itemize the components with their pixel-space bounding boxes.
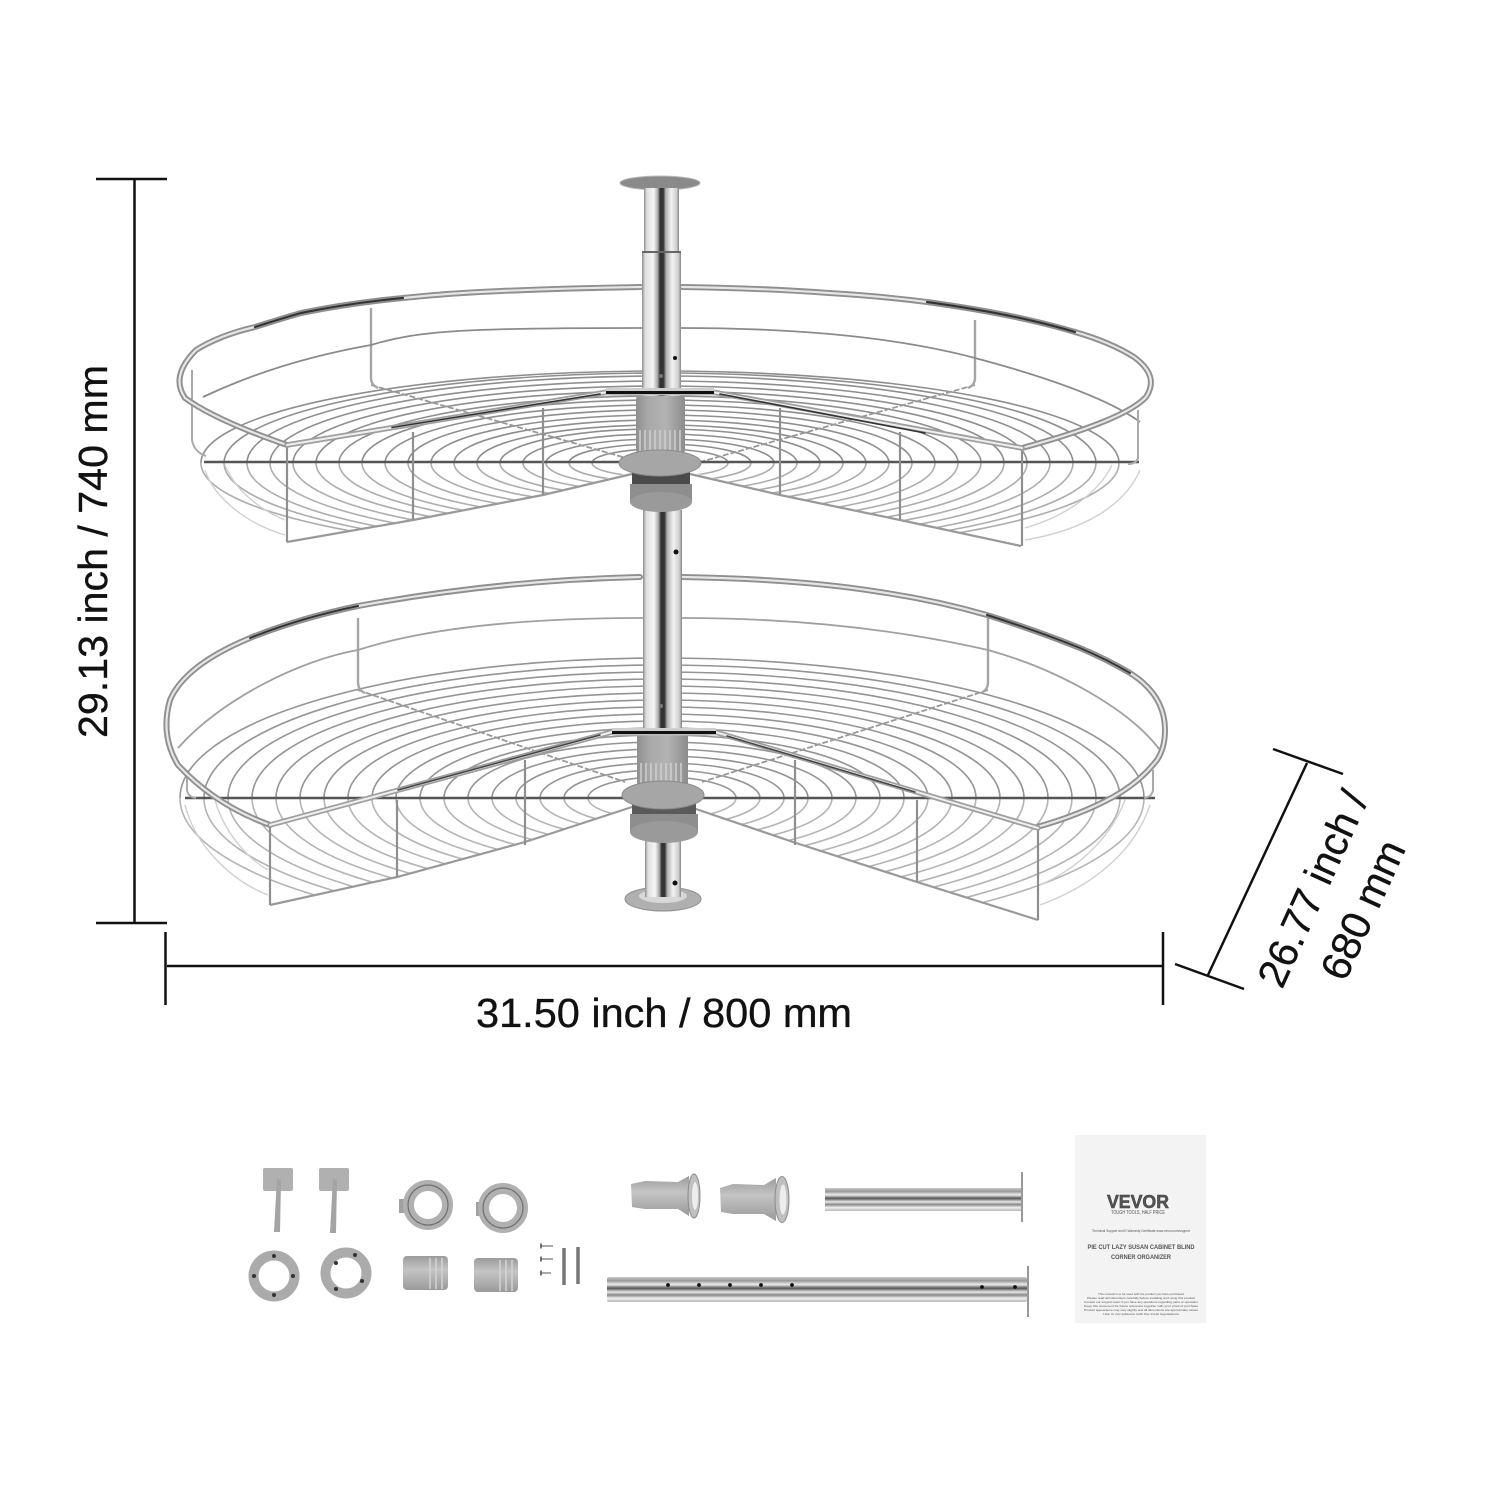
upper basket rim [180, 287, 1151, 448]
part: instruction manual: CORNER ORGANIZER [1111, 1255, 1172, 1261]
part: bearing rings [399, 1185, 523, 1228]
part: instruction manual [1075, 1135, 1206, 1323]
dimension: height [70, 179, 167, 923]
lower hub [612, 728, 716, 843]
upper basket floor wires [201, 371, 1139, 555]
part: instruction manual: TOUGH TOOLS, HALF PRICE [1111, 1210, 1166, 1216]
manual fine print: Keep this document for future reference together with your proof of purchase [1084, 1304, 1198, 1308]
manual fine print: Please read all instructions carefully before installing and using this product [1087, 1296, 1195, 1300]
part: bearing connectors [631, 1174, 789, 1222]
manual fine print: Use in compliance with the local regulations [1103, 1312, 1180, 1316]
part: wall brackets [263, 1168, 349, 1233]
lower basket rim [166, 577, 1165, 828]
upper basket walls [192, 308, 1140, 546]
middle pole [643, 510, 682, 732]
dimension: width [166, 932, 1163, 1036]
part: flange washers [252, 1252, 366, 1297]
lower basket [166, 577, 1165, 938]
manual fine print: This manual is to be used with the product you have purchased [1098, 1292, 1184, 1296]
pole holes [659, 356, 678, 886]
bottom mounting plate [625, 887, 701, 911]
manual logo: VEVOR [1107, 1192, 1169, 1212]
part: screws and pins [541, 1244, 578, 1285]
top mounting plate [620, 176, 700, 190]
bottom pole [645, 840, 681, 897]
part: instruction manual: Technical Support and E-Warranty Certificate www.vevor.com/support [1092, 1229, 1190, 1233]
manual fine print: Contact our support team if you have any questions regarding parts or operation [1084, 1300, 1198, 1304]
depth label line 1: 26.77 inch / [1248, 783, 1378, 994]
upper basket [180, 287, 1151, 555]
part: splined sleeves [403, 1256, 518, 1292]
central pole [620, 176, 701, 911]
manual fine print: Product appearance may vary slightly and all dimensions are approximate values [1084, 1308, 1199, 1312]
width label: 31.50 inch / 800 mm [476, 990, 852, 1036]
depth label line 2: 680 mm [1311, 833, 1415, 987]
included parts [252, 1135, 1206, 1323]
height label: 29.13 inch / 740 mm [70, 365, 116, 738]
manual title: PIE CUT LAZY SUSAN CABINET BLIND [1088, 1245, 1195, 1251]
upper hub [606, 388, 714, 512]
lower basket walls [178, 618, 1160, 920]
upper pole [644, 188, 679, 254]
dimension: depth [1175, 749, 1415, 994]
part: long pole [607, 1266, 1029, 1317]
part: short pole [825, 1172, 1023, 1222]
manual fine print [1084, 1292, 1199, 1316]
lower basket floor wires [180, 658, 1155, 938]
product: two-tier lazy susan organizer [166, 176, 1165, 938]
